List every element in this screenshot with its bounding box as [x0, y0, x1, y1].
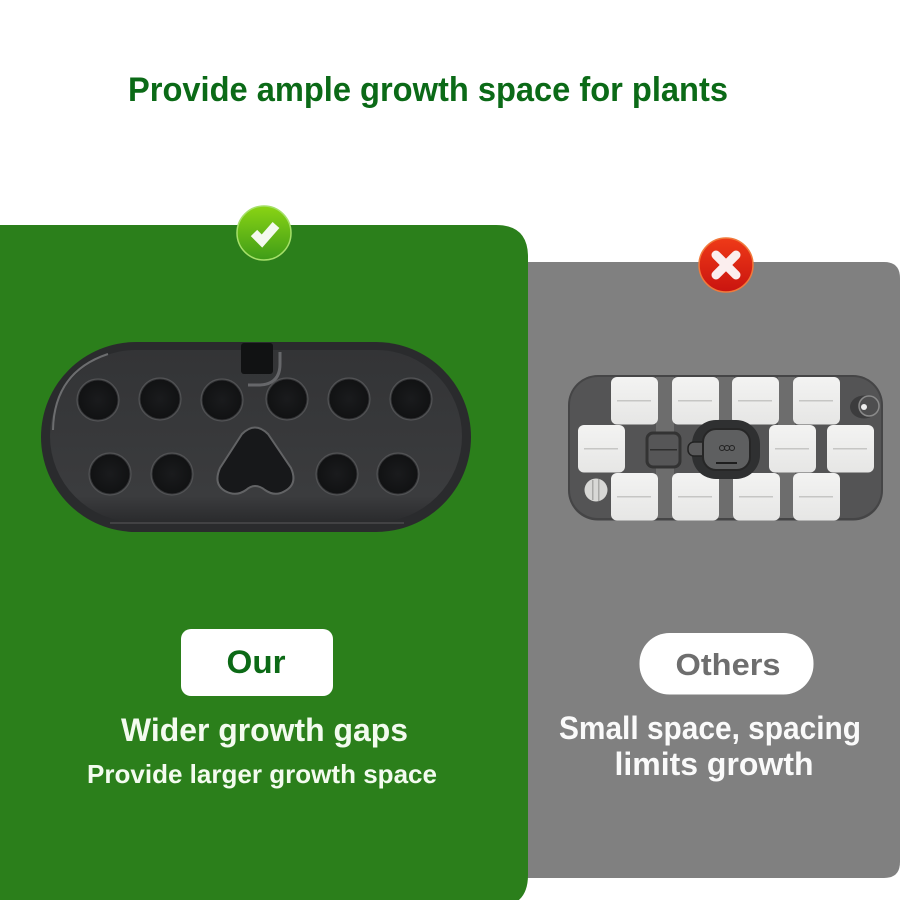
label: our: [181, 629, 333, 696]
round planting holes: [77, 378, 432, 495]
title: Provide ample growth space for plants: [128, 71, 728, 109]
text: our subheading: Provide larger growth space: [87, 759, 437, 789]
icon: red cross: [699, 238, 753, 292]
product photo: others tray: [568, 375, 883, 520]
central pump unit: [688, 420, 760, 479]
square latch: [647, 433, 680, 467]
product photo: our tray: [41, 342, 471, 532]
panel: others: [500, 262, 900, 878]
label: our: Our: [226, 644, 286, 680]
triangular hole: [217, 428, 293, 494]
text: others description: limits growth: [614, 746, 814, 782]
white planting plugs: [578, 377, 874, 520]
tray top notch: [241, 343, 280, 385]
text: our heading: Wider growth gaps: [121, 712, 408, 748]
icon: green check: [237, 206, 291, 260]
text: others description: [559, 710, 861, 782]
knob top right: [850, 396, 879, 418]
text: others description: Small space, spacing: [559, 710, 861, 746]
label: others: Others: [676, 647, 780, 682]
panel: our: [0, 225, 528, 900]
screw cap bottom left: [584, 478, 608, 502]
label: others: [640, 633, 814, 694]
